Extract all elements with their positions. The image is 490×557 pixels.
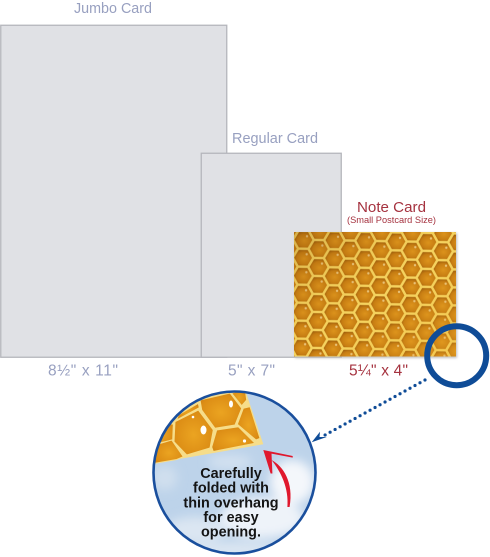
detail caption bbox=[183, 466, 279, 540]
regular card bbox=[201, 153, 341, 357]
regular card label: Regular Card bbox=[232, 130, 318, 147]
dimension: note: 5¼" x 4" bbox=[349, 362, 408, 380]
clouds bbox=[153, 455, 314, 557]
honeycomb corner bbox=[155, 392, 264, 464]
detail caption: thin overhang bbox=[183, 496, 279, 512]
dotted arrow bbox=[312, 380, 425, 442]
detail caption: opening. bbox=[201, 524, 261, 540]
magnifier ring bbox=[427, 326, 486, 385]
jumbo card bbox=[1, 25, 227, 357]
dimension: jumbo: 8½" x 11" bbox=[48, 362, 118, 380]
detail caption: folded with bbox=[193, 480, 269, 496]
detail circle bbox=[152, 390, 317, 555]
note card label: (Small Postcard Size) bbox=[347, 215, 436, 226]
note card label: Note Card bbox=[357, 199, 426, 216]
jumbo card label: Jumbo Card bbox=[74, 0, 152, 17]
dimension: regular: 5" x 7" bbox=[228, 362, 275, 380]
red curved arrow bbox=[263, 450, 293, 507]
note card with honeycomb bbox=[294, 232, 457, 358]
detail caption: Carefully bbox=[200, 466, 262, 482]
note card label bbox=[347, 199, 436, 226]
detail caption: for easy bbox=[203, 510, 259, 526]
